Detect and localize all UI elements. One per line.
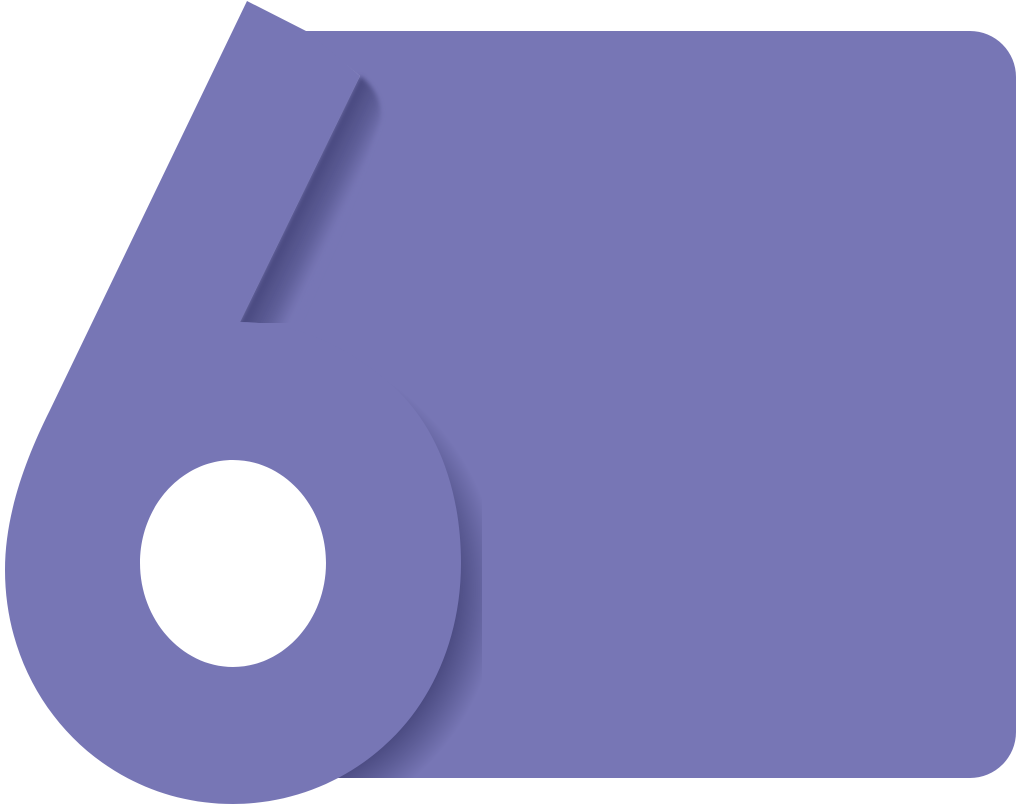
- shadow: bowl of six: [338, 418, 482, 778]
- panel: rounded rectangle: [240, 31, 1016, 778]
- numeral six: [5, 1, 461, 804]
- shadow: upper stem of six: [236, 76, 381, 330]
